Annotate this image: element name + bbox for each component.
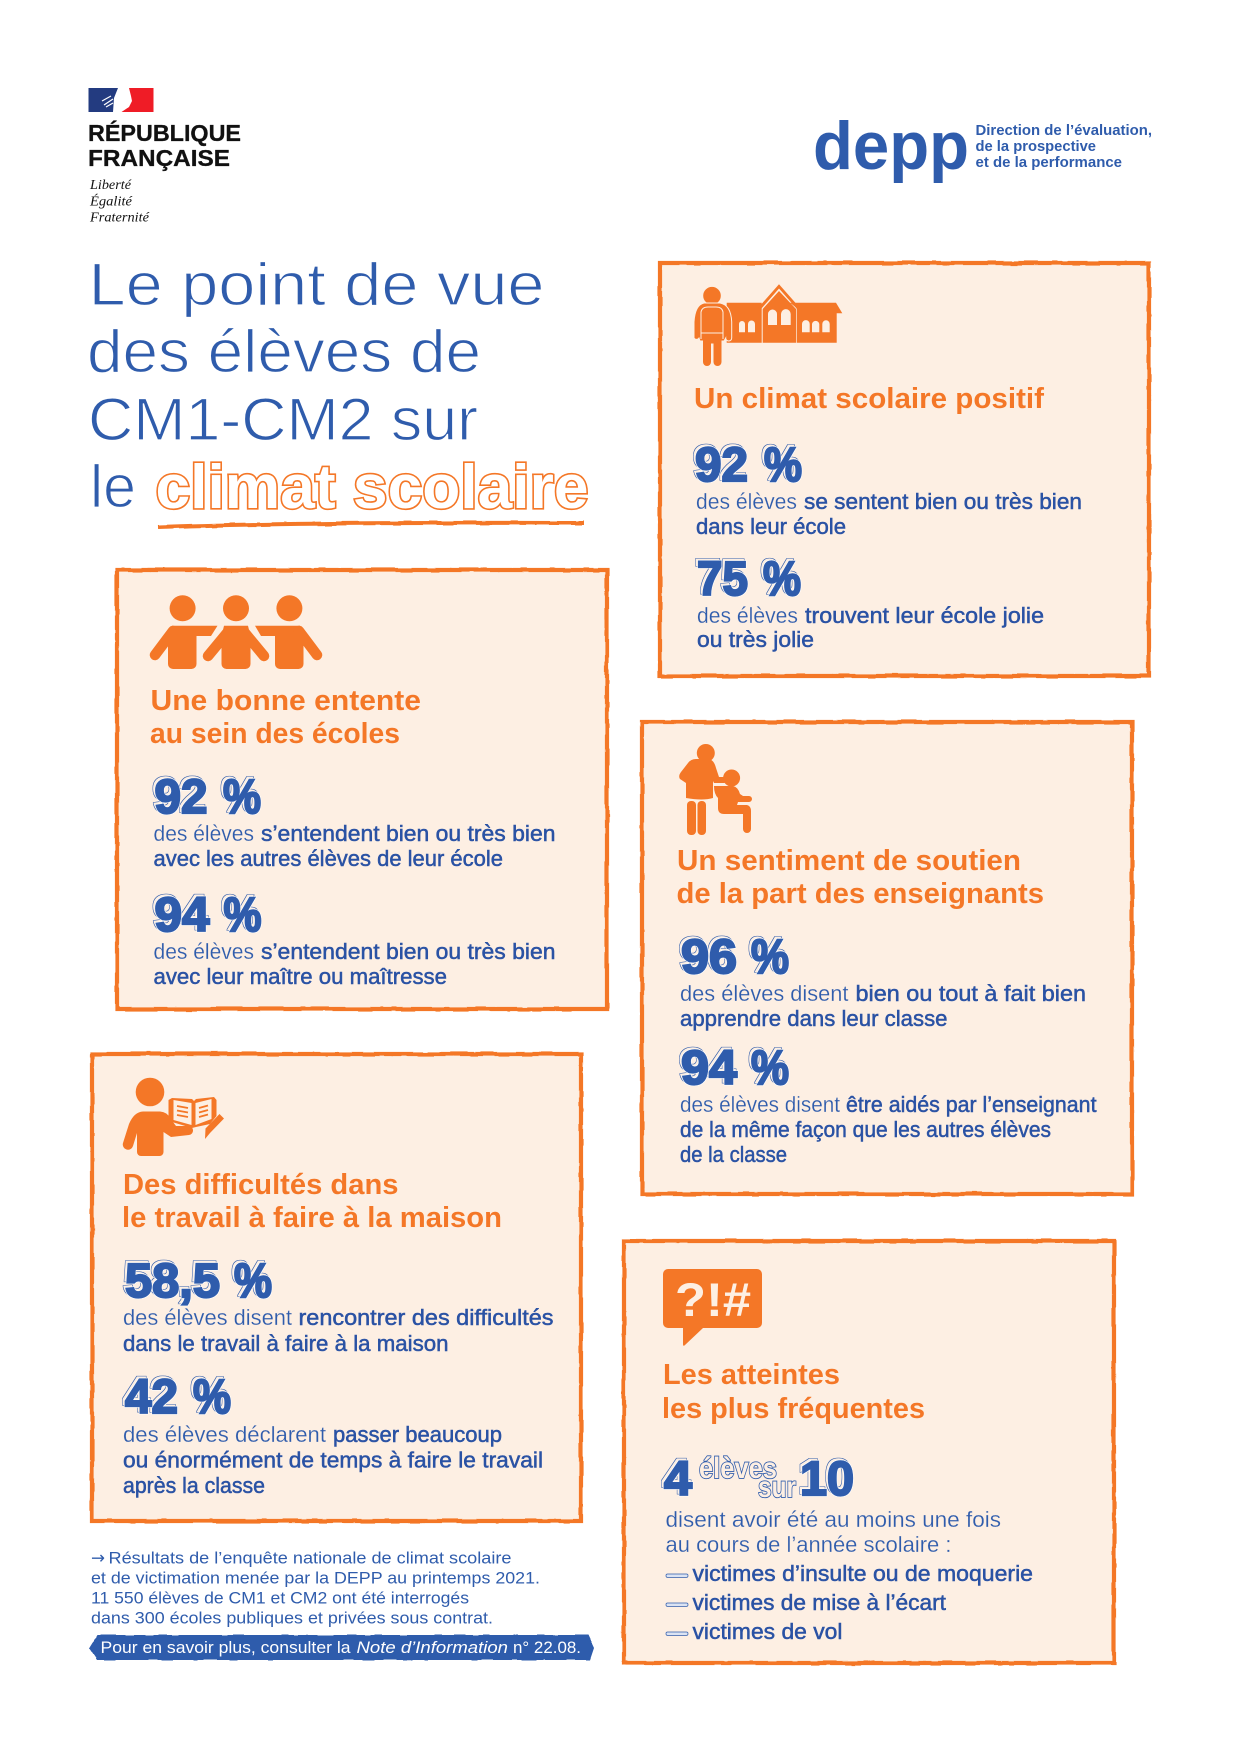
stat: 96 %: 96 [681,931,737,984]
panel: bonne entente [117,570,607,1009]
stat: 94 %: 94 [681,1042,737,1095]
text: stat 2 description: ou très jolie [697,627,814,652]
stat: 58,5 % [125,1255,272,1308]
text: stat 1 description: apprendre dans leur classe [680,1006,948,1031]
list: types of victimisation: victimes de mise à l’écart [692,1590,946,1615]
text: stat 1 description: des élèves [154,821,254,846]
icon: speech bubble [663,1269,762,1346]
stat: 75 % [697,553,801,606]
text: stat 1 description: des élèves [696,489,797,514]
text: survey note [91,1548,540,1628]
text: stat 1 description: bien ou tout à fait bien [856,981,1086,1006]
heading: Un sentiment de soutien [677,845,1021,877]
stat: 92 %: 92 [154,771,208,824]
logo: depp: de la prospective [976,139,1096,155]
logo: depp [813,108,1152,184]
icon: speech bubble: ?!# [675,1273,751,1326]
heading [122,1169,502,1234]
title [87,251,588,527]
text: stat 2 description [123,1422,543,1498]
icon: student and school [694,284,842,366]
heading: Une bonne entente [150,685,421,717]
text: stat 2 description: des élèves disent [680,1092,840,1117]
stat: 92 %: % [223,771,261,824]
text: stat 1 description: des élèves disent [123,1305,292,1330]
text: survey note: et de victimation menée par la DEPP au printemps 2021. [91,1568,540,1588]
stat: 4 élèves sur 10: élèves [699,1452,777,1485]
title: le [90,453,136,520]
icon: teacher and seated student [679,744,752,835]
text: stat 1 description [696,489,1082,539]
title: climat scolaire [156,453,588,522]
text: stat 2 description: être aidés par l’enseignant [846,1092,1096,1117]
panel: difficultés travail à la maison [92,1054,581,1521]
text: stat 2 description: passer beaucoup [333,1422,502,1447]
list: types of victimisation [666,1561,1033,1644]
text: stat 1 description: avec les autres élèves de leur école [154,846,503,871]
text: stat 2 description: avec leur maître ou maîtresse [154,964,447,989]
text: motto [89,177,150,224]
stat: 94 % [681,1042,789,1095]
heading [676,845,1044,910]
panel: soutien des enseignants [642,722,1132,1194]
text: stat 2 description: de la même façon que les autres élèves [680,1117,1051,1142]
icon: flag [88,88,154,112]
text: stat 1 description: se sentent bien ou très bien [804,489,1082,514]
stat: 94 %: % [751,1042,789,1095]
text: stat 2 description: des élèves déclarent [123,1422,326,1447]
text: stat 1 description: des élèves disent [680,981,848,1006]
heading: le travail à faire à la maison [122,1202,502,1234]
heading: les plus fréquentes [662,1393,925,1425]
list: types of victimisation: victimes d’insulte ou de moquerie [692,1561,1033,1586]
heading [662,1359,925,1425]
text: motto: Égalité [89,194,133,208]
stat: 94 % [154,889,262,942]
stat: 94 %: % [224,889,262,942]
text: stat 1 description [680,981,1086,1031]
text: description: au cours de l’année scolaire : [666,1532,952,1557]
stat: 96 % [681,931,789,984]
title: CM1-CM2 sur [88,386,478,453]
text: stat 2 description: de la classe [680,1142,787,1167]
text: stat 1 description [154,821,556,871]
heading: Des difficultés dans [123,1169,398,1201]
panel: climat scolaire positif [660,263,1149,676]
text: survey note: → [91,1548,105,1568]
stat: 4 élèves sur 10: 10 [800,1453,854,1506]
text: stat 1 description: dans leur école [696,514,846,539]
text: survey note: Résultats de l’enquête nationale de climat scolaire [108,1548,511,1568]
text: description: disent avoir été au moins une fois [666,1507,1001,1532]
text: stat 1 description [123,1305,554,1356]
banner: more information [89,1635,594,1660]
text: stat 2 description: après la classe [123,1473,265,1498]
text: stat 2 description: ou énormément de temps à faire le travail [123,1448,543,1472]
title: Le point de vue [88,251,544,318]
text: stat 2 description: des élèves [154,939,254,964]
logo: depp: et de la performance [976,155,1122,171]
stat: 58,5 %: 58,5 [125,1255,220,1308]
heading: de la part des enseignants [676,878,1044,910]
banner: more information: n° 22.08. [513,1638,581,1657]
heading: au sein des écoles [150,718,400,750]
stat: 92 % [154,771,261,824]
stat: 42 % [125,1371,231,1424]
stat: 58,5 %: % [234,1255,272,1308]
stat: 75 %: % [763,553,801,606]
heading: Les atteintes [663,1359,840,1391]
banner: more information: Note d’Information [356,1638,508,1657]
text: république française: RÉPUBLIQUE [88,119,241,146]
text: stat 2 description: des élèves [697,603,798,628]
text: stat 1 description: s’entendent bien ou très bien [261,821,556,846]
heading [150,685,421,750]
stat: 92 % [695,439,802,492]
text: survey note: dans 300 écoles publiques et privées sous contrat. [91,1608,493,1628]
banner: more information: Pour en savoir plus, consulter la [100,1638,351,1657]
stat: 42 %: 42 [125,1371,178,1424]
stat: 96 %: % [751,931,789,984]
icon: child with book and pencil [123,1078,224,1156]
panel: atteintes les plus fréquentes [624,1241,1114,1663]
text: stat 2 description [697,603,1044,652]
logo: depp: Direction de l’évaluation, [976,123,1152,139]
text: stat 2 description: s’entendent bien ou très bien [261,939,556,964]
text: motto: Liberté [89,177,132,192]
text: stat 2 description [680,1092,1096,1167]
list: types of victimisation: victimes de vol [692,1619,842,1644]
stat: 4 élèves sur 10: sur [758,1471,796,1504]
title: des élèves de [87,318,481,385]
text: république française [88,119,241,171]
heading: Un climat scolaire positif [694,383,1044,415]
text: description [666,1507,1001,1557]
text: stat 1 description: dans le travail à faire à la maison [123,1331,449,1356]
logo: République française [88,88,241,224]
text: survey note: 11 550 élèves de CM1 et CM2 ont été interrogés [91,1588,469,1608]
text: stat 1 description: rencontrer des difficultés [298,1305,554,1330]
stat: 42 %: % [193,1371,231,1424]
stat: 94 %: 94 [154,889,210,942]
text: motto: Fraternité [89,210,150,224]
text: république française: FRANÇAISE [88,145,230,171]
stat: 4 élèves sur 10: 4 [664,1453,692,1506]
stat: 92 %: % [764,439,802,492]
icon: three children [155,595,317,669]
logo: depp: depp [813,108,969,184]
stat: 75 %: 75 [697,553,748,606]
text: stat 2 description [154,939,556,989]
stat: 92 %: 92 [695,439,748,492]
stat: 4 élèves sur 10 [664,1452,854,1506]
text: stat 2 description: trouvent leur école jolie [805,603,1044,628]
